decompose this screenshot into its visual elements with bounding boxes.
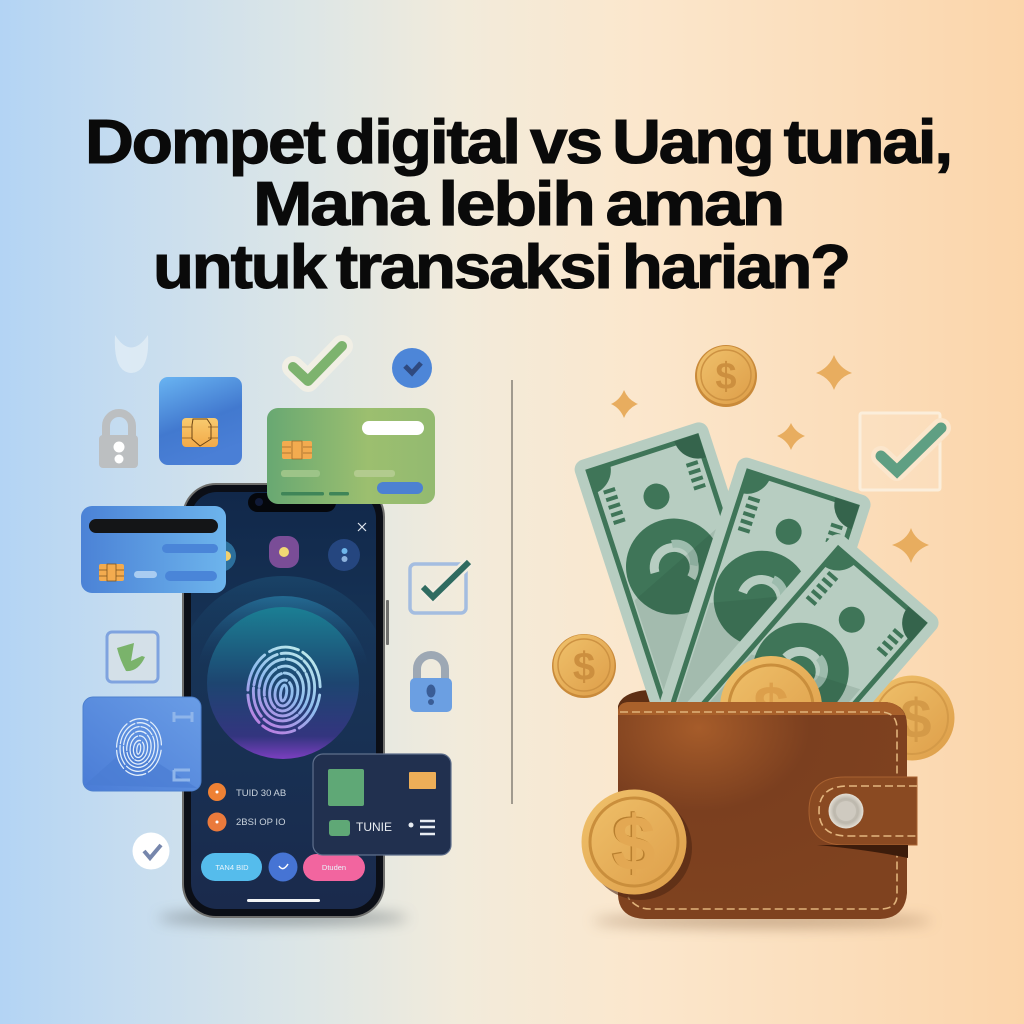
icon: blue chip tile: [159, 377, 242, 465]
home bar: [247, 899, 320, 902]
wallet shadow: [592, 915, 932, 927]
green card: [267, 408, 435, 504]
wallet back edge: [618, 690, 907, 730]
check badge white: [132, 832, 170, 870]
action buttons: TAN4 BID: [215, 863, 249, 872]
panel: cash wallet illustration: [552, 345, 954, 927]
phone: [176, 483, 390, 918]
fingerprint orb: [207, 607, 359, 759]
large front coin: [582, 790, 692, 900]
coin behind wallet right: [870, 676, 954, 760]
large front coin: $: [612, 799, 656, 887]
transaction rows: [208, 783, 286, 832]
action buttons: [201, 852, 365, 882]
left coin: [552, 634, 616, 698]
transaction rows: TUID 30 AB: [236, 788, 286, 799]
sparkles: [611, 355, 929, 563]
coin in wallet: [720, 656, 822, 758]
bill three: [650, 530, 943, 837]
left coin: $: [573, 645, 595, 689]
icon: faint shield: [115, 335, 148, 373]
check box left: [107, 632, 158, 682]
transaction rows: 2BSI OP IO: [236, 817, 285, 828]
title: Mana lebih aman: [253, 170, 783, 239]
top coin: [695, 345, 757, 407]
fingerprint card: [83, 697, 201, 791]
top coin: $: [715, 356, 737, 398]
check box right: [410, 562, 469, 613]
icon: green check sticker: [293, 346, 342, 381]
blue magnetic card: [81, 506, 226, 593]
coin in wallet: $: [753, 672, 789, 744]
title: Dompet digital vs Uang tunai,: [85, 108, 951, 177]
title: [85, 108, 951, 302]
phone shadow: [158, 911, 408, 925]
phone notch: [248, 493, 336, 512]
wallet clasp: [809, 777, 917, 858]
center divider: [512, 380, 513, 804]
large front coin: $: [611, 798, 654, 886]
check square: [860, 413, 941, 490]
title: untuk transaksi harian?: [153, 233, 849, 302]
bill two: [652, 455, 873, 769]
glow arcs: [200, 576, 365, 650]
coin behind wallet right: $: [900, 687, 932, 750]
dark card: TUNIE: [356, 820, 392, 834]
icon: blue padlock: [410, 655, 452, 712]
icon: blue check badge: [392, 348, 432, 388]
panel: digital wallet illustration: [81, 335, 469, 925]
action buttons: Dtuden: [322, 863, 346, 872]
phone app icons: [204, 523, 366, 572]
icon: grey padlock: [99, 413, 138, 468]
bill one: [572, 420, 793, 734]
wallet front: [618, 702, 917, 919]
dark card: [313, 754, 451, 855]
